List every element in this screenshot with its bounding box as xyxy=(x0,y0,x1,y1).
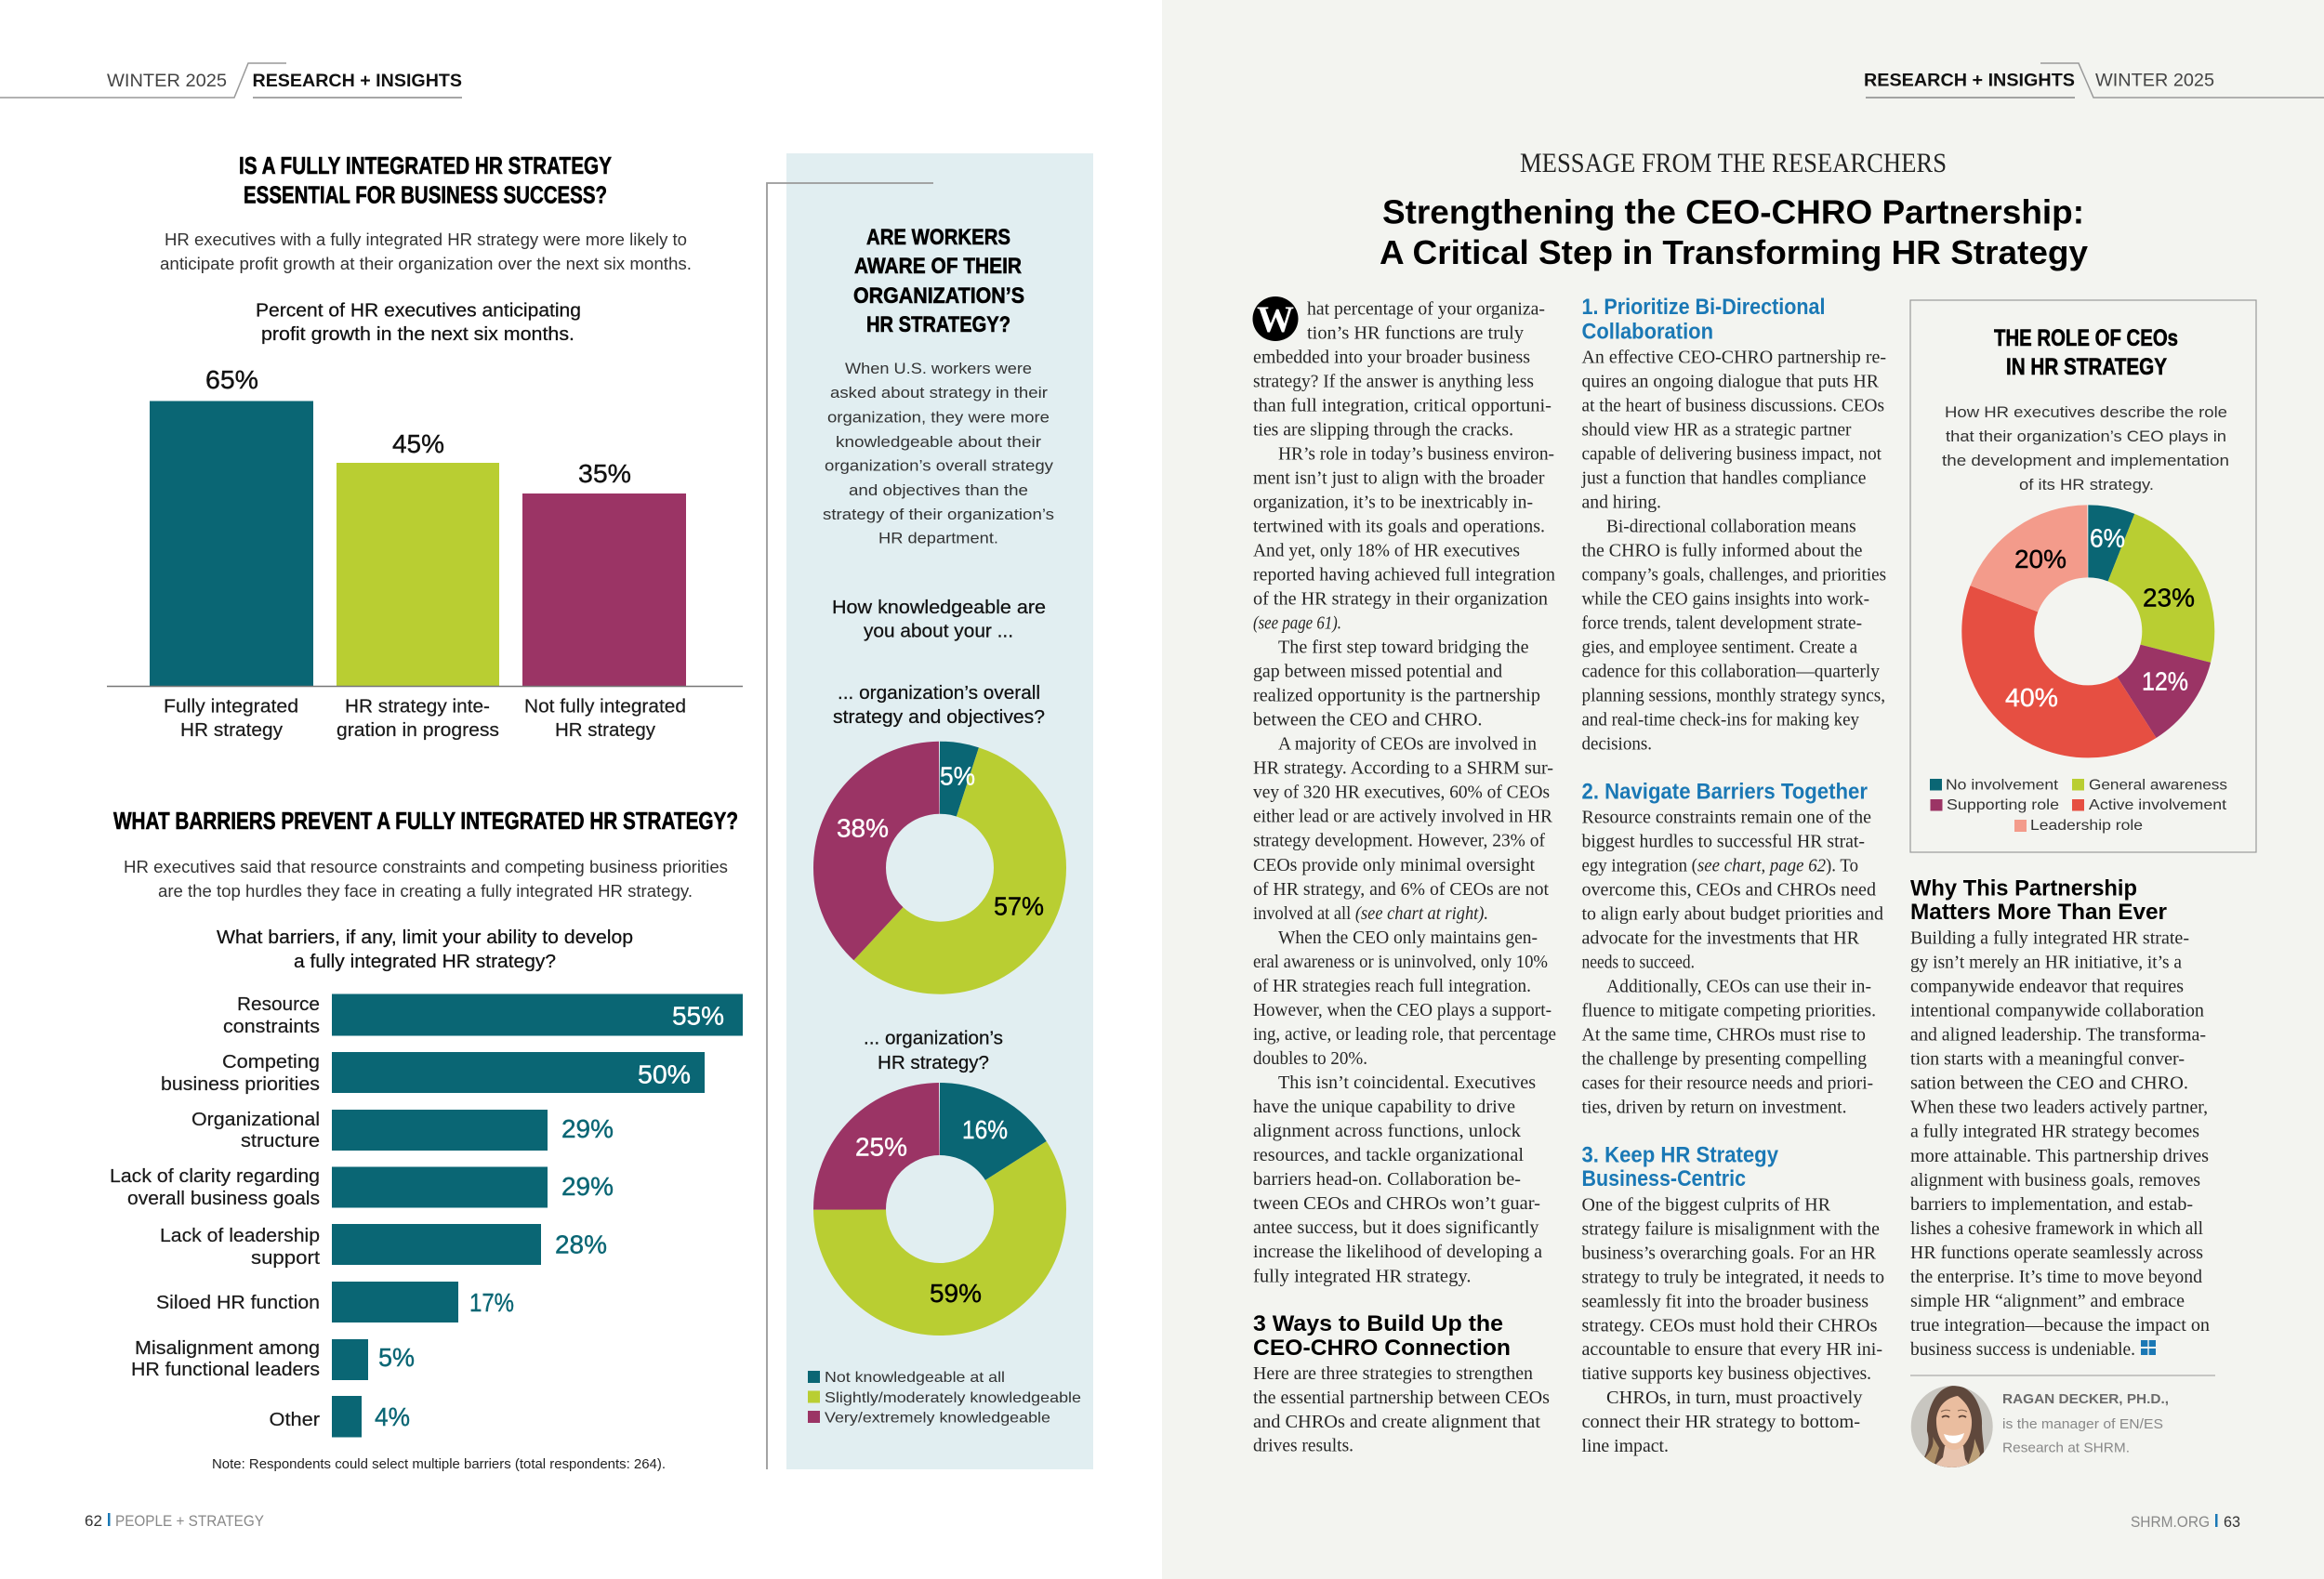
chart question: knowledge: you about your ... xyxy=(864,621,1013,641)
column 1 body text: ing, active, or leading role, that percentage xyxy=(1253,1024,1556,1045)
author bio: RAGAN DECKER, PH.D., xyxy=(2002,1391,2169,1407)
column 1 body text: between the CEO and CHRO. xyxy=(1253,710,1482,730)
intro text: worker awareness: strategy of their organization’s xyxy=(823,506,1054,523)
legend: knowledge: Very/extremely knowledgeable xyxy=(825,1411,1050,1426)
chart title: HR strategy: ... organization’s xyxy=(864,1028,1003,1048)
intro text: worker awareness xyxy=(823,360,1054,546)
chart question: barriers: What barriers, if any, limit your ability to develop xyxy=(217,928,633,948)
strategy 1 body text: just a function that handles compliance xyxy=(1581,467,1867,488)
column 1 body text: organization, it’s to be inextricably in- xyxy=(1253,493,1533,513)
right running header xyxy=(1864,63,2324,98)
heading: strategy 1: 1. Prioritize Bi-Directional xyxy=(1582,295,1826,320)
column 1 body text: ment isn’t just to align with the broader xyxy=(1253,467,1545,488)
intro text: role of CEOs xyxy=(1942,403,2229,493)
why this partnership body text: simple HR “alignment” and embrace xyxy=(1910,1291,2185,1311)
why this partnership body text: Building a fully integrated HR strate- xyxy=(1910,928,2189,948)
strategy 3 body text: tiative supports key business objectives. xyxy=(1582,1363,1871,1384)
right page footer: 63 xyxy=(2224,1513,2240,1531)
bar chart: barriers: overall business goals xyxy=(127,1189,320,1209)
bar chart: barriers: 17% xyxy=(469,1288,514,1317)
intro text: role of CEOs: that their organization’s CEO plays in xyxy=(1946,428,2226,445)
intro text: worker awareness: organization, they were more xyxy=(827,409,1050,426)
bar chart: profit growth: gration in progress xyxy=(337,720,499,741)
panel: worker awareness xyxy=(767,153,1093,1469)
column 1 body text: resources, and tackle organizational xyxy=(1253,1145,1524,1165)
bar chart: profit growth: Not fully integrated xyxy=(524,697,686,717)
panel: role of CEOs xyxy=(1910,300,2256,852)
column 1 body text: tertwined with its goals and operations. xyxy=(1253,517,1545,537)
column 1 body text: When the CEO only maintains gen- xyxy=(1278,928,1538,948)
article column 3 xyxy=(1910,875,2210,1360)
author portrait xyxy=(1910,1385,1994,1472)
heading: barriers: WHAT BARRIERS PREVENT A FULLY INTEGRATED HR STRATEGY? xyxy=(113,807,738,835)
3 ways body text: Here are three strategies to strengthen xyxy=(1253,1363,1533,1384)
why this partnership body text: a fully integrated HR strategy becomes xyxy=(1910,1122,2199,1142)
why this partnership body text: When these two leaders actively partner, xyxy=(1910,1098,2208,1118)
column 1 body text: embedded into your broader business xyxy=(1253,347,1530,367)
bar chart: profit growth: HR strategy inte- xyxy=(345,697,490,717)
strategy 1 body text: should view HR as a strategic partner xyxy=(1582,419,1852,440)
column 1 body text: of HR strategies reach full integration. xyxy=(1253,976,1531,996)
bar chart: profit growth: Fully integrated xyxy=(164,697,298,717)
donut chart: HR strategy: 25% xyxy=(855,1132,907,1162)
why this partnership body text: and aligned leadership. The transforma- xyxy=(1910,1025,2206,1046)
strategy 2 body text xyxy=(1582,807,1883,1118)
left page footer: 62 xyxy=(85,1512,102,1530)
bar chart: barriers: Competing xyxy=(222,1052,320,1072)
heading: strategy 3: 3. Keep HR Strategy xyxy=(1582,1142,1779,1167)
column 1 body text: of HR strategy, and 6% of CEOs are not xyxy=(1253,879,1549,900)
legend: role of CEOs: Supporting role xyxy=(1947,797,2059,813)
left running header xyxy=(0,63,462,98)
strategy 2 body text: advocate for the investments that HR xyxy=(1582,928,1860,949)
strategy 3 body text: line impact. xyxy=(1582,1436,1669,1456)
donut chart: role of CEOs xyxy=(1998,524,2195,721)
column 1 body text: tion’s HR functions are truly xyxy=(1307,322,1524,343)
why this partnership body text: companywide endeavor that requires xyxy=(1910,976,2184,996)
strategy 2 body text: overcome this, CEOs and CHROs need xyxy=(1582,880,1876,901)
column 1 body text: tween CEOs and CHROs won’t guar- xyxy=(1253,1193,1540,1214)
legend: role of CEOs: General awareness xyxy=(2089,778,2227,794)
bar chart: barriers: 5% xyxy=(378,1343,415,1372)
strategy 1 body text: decisions. xyxy=(1582,734,1652,755)
strategy 3 body text: strategy. CEOs must hold their CHROs xyxy=(1582,1315,1878,1336)
why this partnership body text: more attainable. This partnership drives xyxy=(1910,1146,2209,1166)
intro text: profit growth xyxy=(160,230,692,273)
strategy 2 body text: Resource constraints remain one of the xyxy=(1582,807,1871,827)
chart title: HR strategy xyxy=(864,1028,1003,1073)
article title: Strengthening the CEO-CHRO Partnership: xyxy=(1382,193,2084,231)
heading: worker awareness: AWARE OF THEIR xyxy=(854,254,1022,279)
intro text: role of CEOs: of its HR strategy. xyxy=(2019,476,2154,493)
heading: strategy 3: Business-Centric xyxy=(1582,1166,1746,1191)
strategy 1 body text: company’s goals, challenges, and priorities xyxy=(1582,565,1886,586)
bar chart: barriers: 28% xyxy=(555,1230,607,1258)
heading: strategy 1: Collaboration xyxy=(1582,320,1713,345)
column 1 body text: (see page 61). xyxy=(1253,613,1341,634)
column 1 body text: HR’s role in today’s business environ- xyxy=(1278,443,1554,464)
strategy 1 body text: and real-time check-ins for making key xyxy=(1582,710,1859,730)
why this partnership body text: tion starts with a meaningful conver- xyxy=(1910,1049,2185,1070)
bar chart: barriers: 4% xyxy=(375,1402,410,1431)
strategy 2 body text: Additionally, CEOs can use their in- xyxy=(1606,977,1871,997)
column 1 body text: And yet, only 18% of HR executives xyxy=(1253,541,1520,561)
bar chart: barriers: Lack of leadership xyxy=(160,1226,320,1246)
intro text: barriers: HR executives said that resource constraints and competing business priorities xyxy=(124,858,728,876)
strategy 3 body text xyxy=(1582,1195,1884,1456)
strategy 2 body text: cases for their resource needs and priori- xyxy=(1582,1073,1873,1094)
strategy 3 body text: strategy to truly be integrated, it needs to xyxy=(1582,1267,1884,1287)
donut chart: HR strategy: 59% xyxy=(930,1279,982,1308)
strategy 2 body text: egy integration (see chart, page 62). To xyxy=(1582,855,1858,875)
bar chart: barriers: Misalignment among xyxy=(135,1338,320,1359)
bar chart: barriers: Organizational xyxy=(191,1110,320,1130)
heading: worker awareness: ARE WORKERS xyxy=(866,225,1010,250)
strategy 2 body text: biggest hurdles to successful HR strat- xyxy=(1582,831,1865,851)
strategy 3 body text: connect their HR strategy to bottom- xyxy=(1582,1412,1860,1432)
intro text: barriers xyxy=(124,858,728,901)
strategy 2 body text: ties, driven by return on investment. xyxy=(1582,1098,1846,1118)
heading: 3 ways xyxy=(1253,1311,1511,1361)
legend: knowledge xyxy=(808,1370,1081,1426)
right page footer: SHRM.ORG xyxy=(2131,1513,2210,1531)
chart title: HR strategy: HR strategy? xyxy=(878,1053,989,1073)
heading: 3 ways: CEO-CHRO Connection xyxy=(1253,1336,1511,1361)
3 ways body text: the essential partnership between CEOs xyxy=(1253,1388,1550,1408)
icon: end mark xyxy=(2141,1340,2156,1355)
article column 1 xyxy=(1253,296,1556,1456)
author bio: is the manager of EN/ES xyxy=(2002,1416,2163,1432)
bar chart: barriers: business priorities xyxy=(161,1074,320,1095)
left page footer: PEOPLE + STRATEGY xyxy=(115,1512,264,1530)
column 1 body text: involved at all (see chart at right). xyxy=(1253,903,1488,924)
donut chart: role of CEOs: 12% xyxy=(2142,667,2188,696)
legend: knowledge: Slightly/moderately knowledgeable xyxy=(825,1390,1081,1406)
donut chart: role of CEOs: 23% xyxy=(2143,584,2195,612)
chart title: overall strategy: strategy and objectives? xyxy=(833,707,1045,728)
column 1 body text: However, when the CEO plays a support- xyxy=(1253,1000,1552,1020)
column 1 body text: realized opportunity is the partnership xyxy=(1253,686,1540,706)
section: barriers xyxy=(110,807,743,1472)
legend: role of CEOs xyxy=(1930,778,2227,834)
strategy 1 body text: at the heart of business discussions. CEOs xyxy=(1582,395,1884,415)
intro text: barriers: are the top hurdles they face in creating a fully integrated HR strategy. xyxy=(158,882,693,901)
heading: fully integrated: ESSENTIAL FOR BUSINESS SUCCESS? xyxy=(244,180,607,208)
bar chart: barriers: 50% xyxy=(638,1059,691,1089)
donut chart: overall strategy: 5% xyxy=(940,762,975,790)
article title: A Critical Step in Transforming HR Strategy xyxy=(1380,233,2088,271)
why this partnership body text: gy isn’t merely an HR initiative, it’s a xyxy=(1910,952,2182,972)
strategy 2 body text: needs to succeed. xyxy=(1582,953,1695,973)
strategy 3 body text: One of the biggest culprits of HR xyxy=(1582,1195,1831,1216)
why this partnership body text: lishes a cohesive framework in which all xyxy=(1910,1218,2203,1239)
author bio: Research at SHRM. xyxy=(2002,1441,2130,1455)
legend: role of CEOs: Leadership role xyxy=(2030,818,2143,834)
chart question: knowledge: How knowledgeable are xyxy=(832,598,1046,618)
column 1 body text: fully integrated HR strategy. xyxy=(1253,1266,1471,1286)
column 1 body text: antee success, but it does significantly xyxy=(1253,1217,1539,1238)
heading: role of CEOs: IN HR STRATEGY xyxy=(2006,354,2167,380)
column 1 body text: increase the likelihood of developing a xyxy=(1253,1242,1542,1262)
bar chart: barriers: 55% xyxy=(672,1002,724,1030)
heading: strategy 1 xyxy=(1582,295,1826,345)
column 1 body text: barriers head-on. Collaboration be- xyxy=(1253,1169,1521,1190)
heading: role of CEOs xyxy=(1994,325,2178,380)
left running header: WINTER 2025 xyxy=(107,72,227,91)
right running header: WINTER 2025 xyxy=(2095,72,2214,91)
strategy 1 body text: and hiring. xyxy=(1582,492,1661,512)
strategy 1 body text: Bi-directional collaboration means xyxy=(1606,517,1856,537)
column 1 body text: vey of 320 HR executives, 60% of CEOs xyxy=(1253,783,1550,803)
column 1 body text: than full integration, critical opportuni- xyxy=(1253,395,1552,415)
chart question: barriers xyxy=(217,928,633,972)
heading: worker awareness xyxy=(853,225,1024,337)
intro text: worker awareness: organization’s overall strategy xyxy=(825,457,1054,474)
heading: fully integrated: IS A FULLY INTEGRATED HR STRATEGY xyxy=(239,151,612,179)
heading: fully integrated xyxy=(239,151,612,208)
bar chart: barriers: Other xyxy=(270,1410,320,1430)
strategy 3 body text: business’s overarching goals. For an HR xyxy=(1582,1243,1877,1263)
bar chart: barriers: structure xyxy=(241,1131,320,1151)
why this partnership body text: the enterprise. It’s time to move beyond xyxy=(1910,1267,2202,1287)
heading: why this partnership xyxy=(1910,875,2167,925)
chart title: overall strategy xyxy=(833,683,1045,728)
column 1 body text: of the HR strategy in their organization xyxy=(1253,589,1548,610)
column 1 body text: either lead or are actively involved in HR xyxy=(1253,807,1553,827)
why this partnership body text: business success is undeniable. xyxy=(1910,1339,2135,1360)
right running header: RESEARCH + INSIGHTS xyxy=(1864,72,2075,91)
donut chart: HR strategy: 16% xyxy=(962,1115,1008,1144)
column 1 body text: eral awareness or is uninvolved, only 10% xyxy=(1253,952,1548,972)
bar chart: barriers: support xyxy=(251,1248,320,1269)
section: fully integrated HR strategy xyxy=(107,151,743,741)
donut chart: overall strategy: 38% xyxy=(837,814,889,843)
column 1 body text: strategy? If the answer is anything less xyxy=(1253,371,1534,391)
strategy 1 body text: while the CEO gains insights into work- xyxy=(1582,589,1869,610)
column 1 body text: A majority of CEOs are involved in xyxy=(1278,734,1537,755)
legend: role of CEOs: Active involvement xyxy=(2089,797,2227,813)
strategy 1 body text: An effective CEO-CHRO partnership re- xyxy=(1582,347,1886,367)
why this partnership body text: intentional companywide collaboration xyxy=(1910,1000,2204,1020)
note: Note: Respondents could select multiple barriers (total respondents: 264). xyxy=(212,1457,666,1472)
bar chart: barriers: Lack of clarity regarding xyxy=(110,1166,320,1187)
intro text: role of CEOs: How HR executives describe the role xyxy=(1945,403,2227,421)
heading: worker awareness: HR STRATEGY? xyxy=(866,312,1010,337)
intro text: profit growth: HR executives with a fully integrated HR strategy were more likely to xyxy=(165,230,687,249)
column 1 body text: CEOs provide only minimal oversight xyxy=(1253,855,1535,875)
chart question: profit growth: Percent of HR executives anticipating xyxy=(256,301,581,322)
column 1 body text: have the unique capability to drive xyxy=(1253,1097,1515,1117)
donut chart: HR strategy xyxy=(850,1115,1030,1308)
chart question: knowledge xyxy=(832,598,1046,641)
bar chart: profit growth: 35% xyxy=(578,459,631,488)
strategy 3 body text: CHROs, in turn, must proactively xyxy=(1606,1388,1863,1408)
heading: strategy 2: 2. Navigate Barriers Together xyxy=(1582,779,1868,805)
chart question: profit growth: profit growth in the next six months. xyxy=(261,324,574,345)
intro text: worker awareness: asked about strategy in their xyxy=(830,384,1048,401)
column 1 body text: hat percentage of your organiza- xyxy=(1307,298,1545,319)
intro text: role of CEOs: the development and implementation xyxy=(1942,452,2229,469)
why this partnership body text: alignment with business goals, removes xyxy=(1910,1170,2200,1191)
donut chart: role of CEOs: 6% xyxy=(2090,524,2125,552)
column 1 body text: HR strategy. According to a SHRM sur- xyxy=(1253,758,1553,779)
column 1 body text: alignment across functions, unlock xyxy=(1253,1121,1521,1141)
heading: why this partnership: Why This Partnership xyxy=(1910,875,2137,901)
article title xyxy=(1380,193,2088,271)
bar chart: profit growth xyxy=(107,365,743,741)
bar chart: barriers: HR functional leaders xyxy=(131,1360,320,1380)
intro text: worker awareness: knowledgeable about their xyxy=(836,433,1041,451)
heading: why this partnership: Matters More Than Ever xyxy=(1910,900,2167,925)
kicker: MESSAGE FROM THE RESEARCHERS xyxy=(1520,148,1947,178)
3 ways body text: and CHROs and create alignment that xyxy=(1253,1412,1540,1432)
chart question: profit growth xyxy=(256,301,581,345)
strategy 1 body text: planning sessions, monthly strategy syncs, xyxy=(1582,686,1885,706)
chart title: overall strategy: ... organization’s overall xyxy=(838,683,1040,704)
author bio xyxy=(2002,1391,2169,1455)
strategy 1 body text: gies, and employee sentiment. Create a xyxy=(1582,638,1857,658)
intro text: worker awareness: When U.S. workers were xyxy=(845,360,1032,377)
intro text: worker awareness: HR department. xyxy=(878,530,998,546)
strategy 2 body text: to align early about budget priorities and xyxy=(1582,904,1883,925)
why this partnership body text: barriers to implementation, and estab- xyxy=(1910,1194,2193,1215)
heading: strategy 3 xyxy=(1582,1142,1779,1191)
bar chart: barriers: constraints xyxy=(223,1017,320,1037)
why this partnership body text: sation between the CEO and CHRO. xyxy=(1910,1073,2188,1094)
3 ways body text xyxy=(1253,1363,1550,1456)
heading: 3 ways: 3 Ways to Build Up the xyxy=(1253,1311,1503,1336)
bar chart: profit growth: 45% xyxy=(392,429,444,458)
donut chart: overall strategy: 57% xyxy=(994,892,1044,921)
donut chart: overall strategy xyxy=(837,762,1044,958)
drop cap: W xyxy=(1257,298,1294,340)
strategy 3 body text: seamlessly fit into the broader business xyxy=(1582,1291,1868,1311)
donut chart: role of CEOs: 40% xyxy=(2005,683,2058,712)
strategy 2 body text: fluence to mitigate competing priorities. xyxy=(1582,1001,1876,1021)
strategy 1 body text: capable of delivering business impact, not xyxy=(1582,443,1882,464)
why this partnership body text: true integration—because the impact on xyxy=(1910,1315,2210,1336)
column 1 body text: gap between missed potential and xyxy=(1253,662,1502,682)
bar chart: profit growth: HR strategy xyxy=(180,720,283,741)
column 1 body text xyxy=(1253,298,1556,1286)
article column 2 xyxy=(1581,295,1886,1456)
bar chart: barriers: 29% xyxy=(561,1114,614,1143)
strategy 1 body text: cadence for this collaboration—quarterly xyxy=(1582,662,1880,682)
strategy 3 body text: accountable to ensure that every HR ini- xyxy=(1582,1339,1882,1360)
strategy 1 body text: force trends, talent development strate- xyxy=(1582,613,1862,634)
intro text: worker awareness: and objectives than the xyxy=(849,481,1028,499)
legend: knowledge: Not knowledgeable at all xyxy=(825,1370,1005,1386)
strategy 3 body text: strategy failure is misalignment with the xyxy=(1582,1219,1880,1240)
column 1 body text: The first step toward bridging the xyxy=(1278,638,1529,658)
heading: role of CEOs: THE ROLE OF CEOs xyxy=(1994,325,2178,351)
column 1 body text: strategy development. However, 23% of xyxy=(1253,831,1545,851)
column 1 body text: This isn’t coincidental. Executives xyxy=(1278,1072,1536,1093)
strategy 1 body text xyxy=(1581,347,1886,755)
strategy 2 body text: At the same time, CHROs must rise to xyxy=(1582,1025,1866,1046)
legend: role of CEOs: No involvement xyxy=(1946,778,2059,794)
bar chart: barriers: 29% xyxy=(561,1172,614,1201)
column 1 body text: reported having achieved full integration xyxy=(1253,565,1555,586)
left running header: RESEARCH + INSIGHTS xyxy=(253,72,462,91)
bar chart: barriers: Siloed HR function xyxy=(156,1293,320,1313)
intro text: profit growth: anticipate profit growth at their organization over the next six months. xyxy=(160,255,692,273)
why this partnership body text: HR functions operate seamlessly across xyxy=(1910,1243,2203,1263)
right page background xyxy=(1162,0,2324,1579)
why this partnership body text xyxy=(1910,928,2210,1360)
bar chart: barriers: Resource xyxy=(237,994,320,1015)
strategy 2 body text: the challenge by presenting compelling xyxy=(1582,1049,1867,1070)
left page background xyxy=(0,0,1162,1579)
3 ways body text: drives results. xyxy=(1253,1436,1353,1456)
strategy 1 body text: quires an ongoing dialogue that puts HR xyxy=(1582,371,1880,391)
heading: worker awareness: ORGANIZATION’S xyxy=(853,283,1024,309)
strategy 1 body text: the CHRO is fully informed about the xyxy=(1582,541,1863,561)
column 1 body text: ties are slipping through the cracks. xyxy=(1253,419,1513,440)
bar chart: profit growth: HR strategy xyxy=(555,720,655,741)
donut chart: role of CEOs: 20% xyxy=(2014,545,2067,573)
bar chart: barriers xyxy=(110,994,743,1437)
chart question: barriers: a fully integrated HR strategy? xyxy=(294,952,556,972)
bar chart: profit growth: 65% xyxy=(205,365,258,394)
column 1 body text: doubles to 20%. xyxy=(1253,1048,1367,1069)
